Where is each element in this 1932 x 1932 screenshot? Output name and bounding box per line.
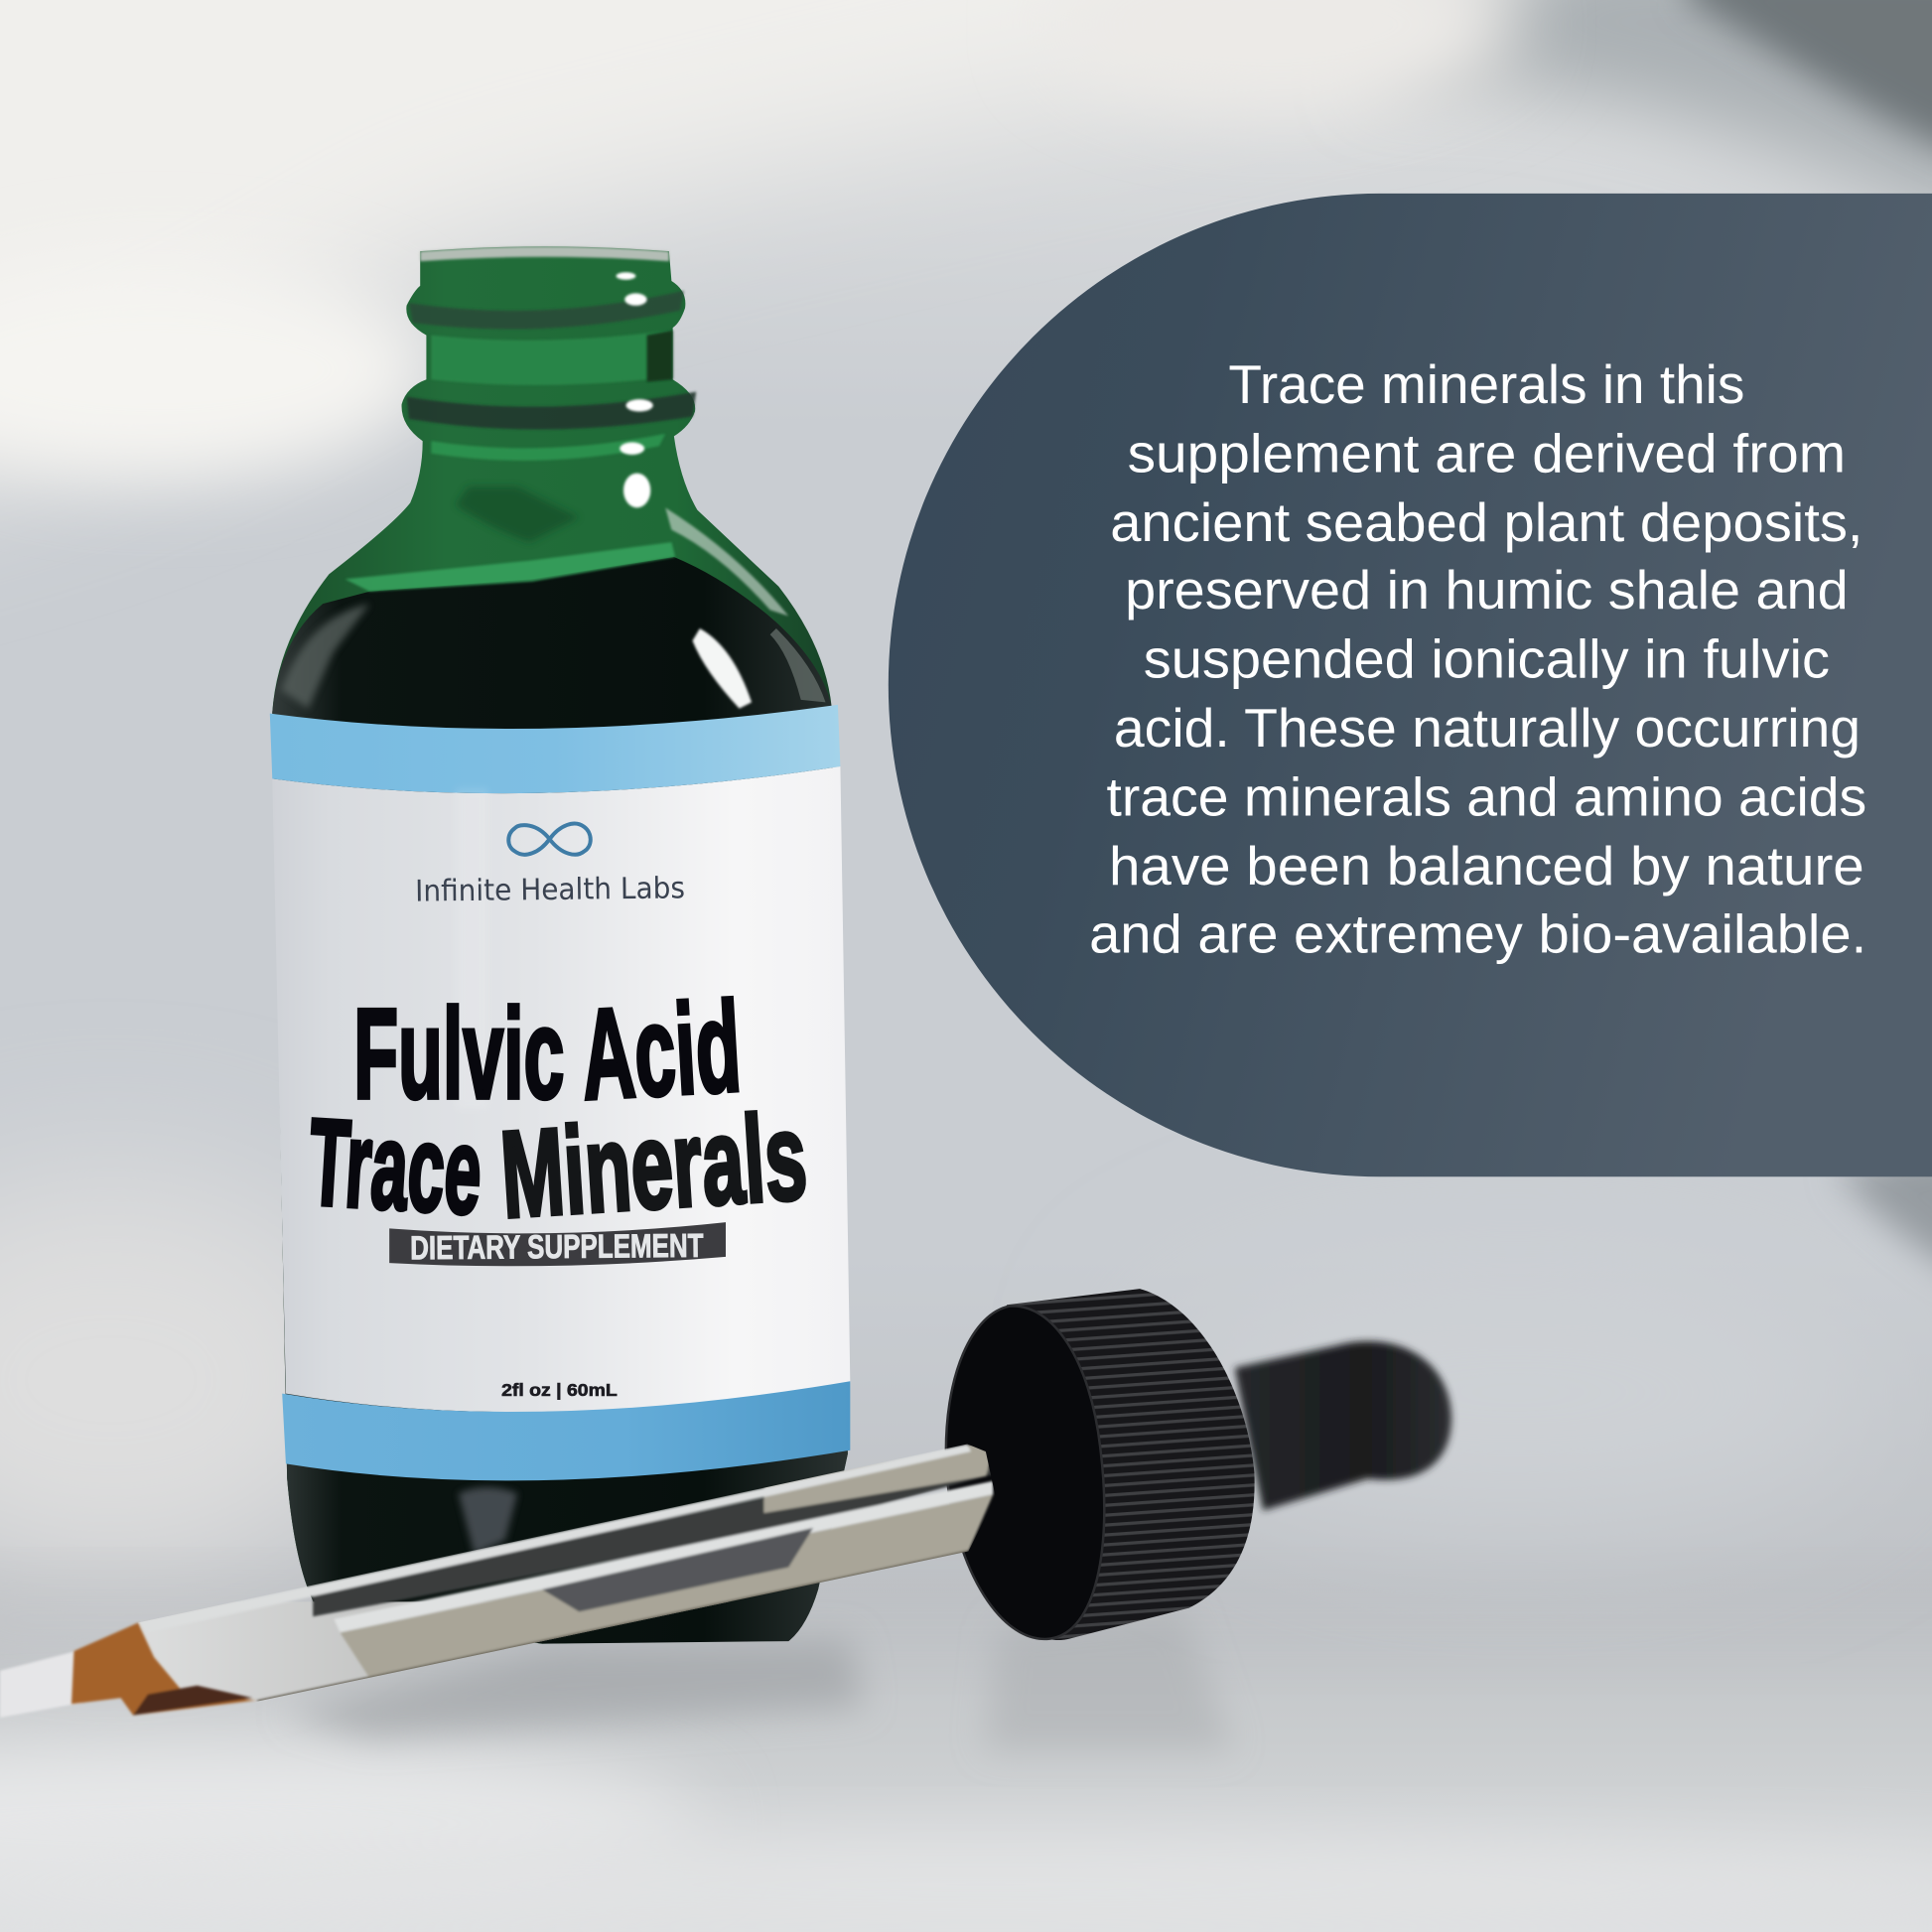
- product title: Fulvic: [353, 983, 564, 1126]
- product bottle: [270, 246, 850, 1644]
- panel shape: [889, 194, 1932, 1176]
- body text: preserved in humic shale and: [1125, 560, 1849, 621]
- body text: trace minerals and amino acids: [1106, 767, 1866, 828]
- floor shadow: [283, 1608, 1232, 1749]
- dark liquid: [272, 557, 848, 1644]
- dietary supplement tag: DIETARY SUPPLEMENT: [410, 1228, 704, 1267]
- body text: have been balanced by nature: [1109, 836, 1864, 897]
- bottom blue band: [282, 1381, 850, 1480]
- volume text: 2fl oz | 60mL: [501, 1380, 618, 1400]
- body text: ancient seabed plant deposits,: [1110, 492, 1863, 553]
- top blue band: [270, 705, 840, 793]
- bottle glass neck and shoulder: [272, 246, 848, 1644]
- glass tube: [138, 1444, 995, 1702]
- ribbed cap: [1007, 1289, 1255, 1640]
- body text: [1089, 354, 1866, 964]
- product title: Minerals: [497, 1088, 810, 1244]
- product title: Trace: [305, 1094, 485, 1241]
- glass highlights: [281, 246, 826, 709]
- product title: Acid: [578, 975, 745, 1127]
- label reflection: [456, 788, 487, 1109]
- body text: acid. These naturally occurring: [1114, 698, 1861, 759]
- bottle base reflection: [459, 1487, 517, 1555]
- panel: description: [889, 194, 1932, 1176]
- label paper: [272, 766, 850, 1412]
- cap opening: [946, 1306, 1104, 1639]
- infinity logo: [508, 824, 591, 855]
- dropper: [0, 1289, 1451, 1725]
- brand name: Infinite Health Labs: [415, 871, 685, 909]
- body text: Trace minerals in this: [1228, 354, 1744, 415]
- rubber bulb: [1235, 1341, 1451, 1511]
- body text: suspended ionically in fulvic: [1144, 629, 1830, 690]
- body text: and are extremey bio-available.: [1089, 903, 1866, 964]
- amber liquid in tip: [71, 1622, 256, 1716]
- product title: [305, 975, 810, 1244]
- dropper tip: [0, 1651, 81, 1718]
- body text: supplement are derived from: [1128, 423, 1846, 483]
